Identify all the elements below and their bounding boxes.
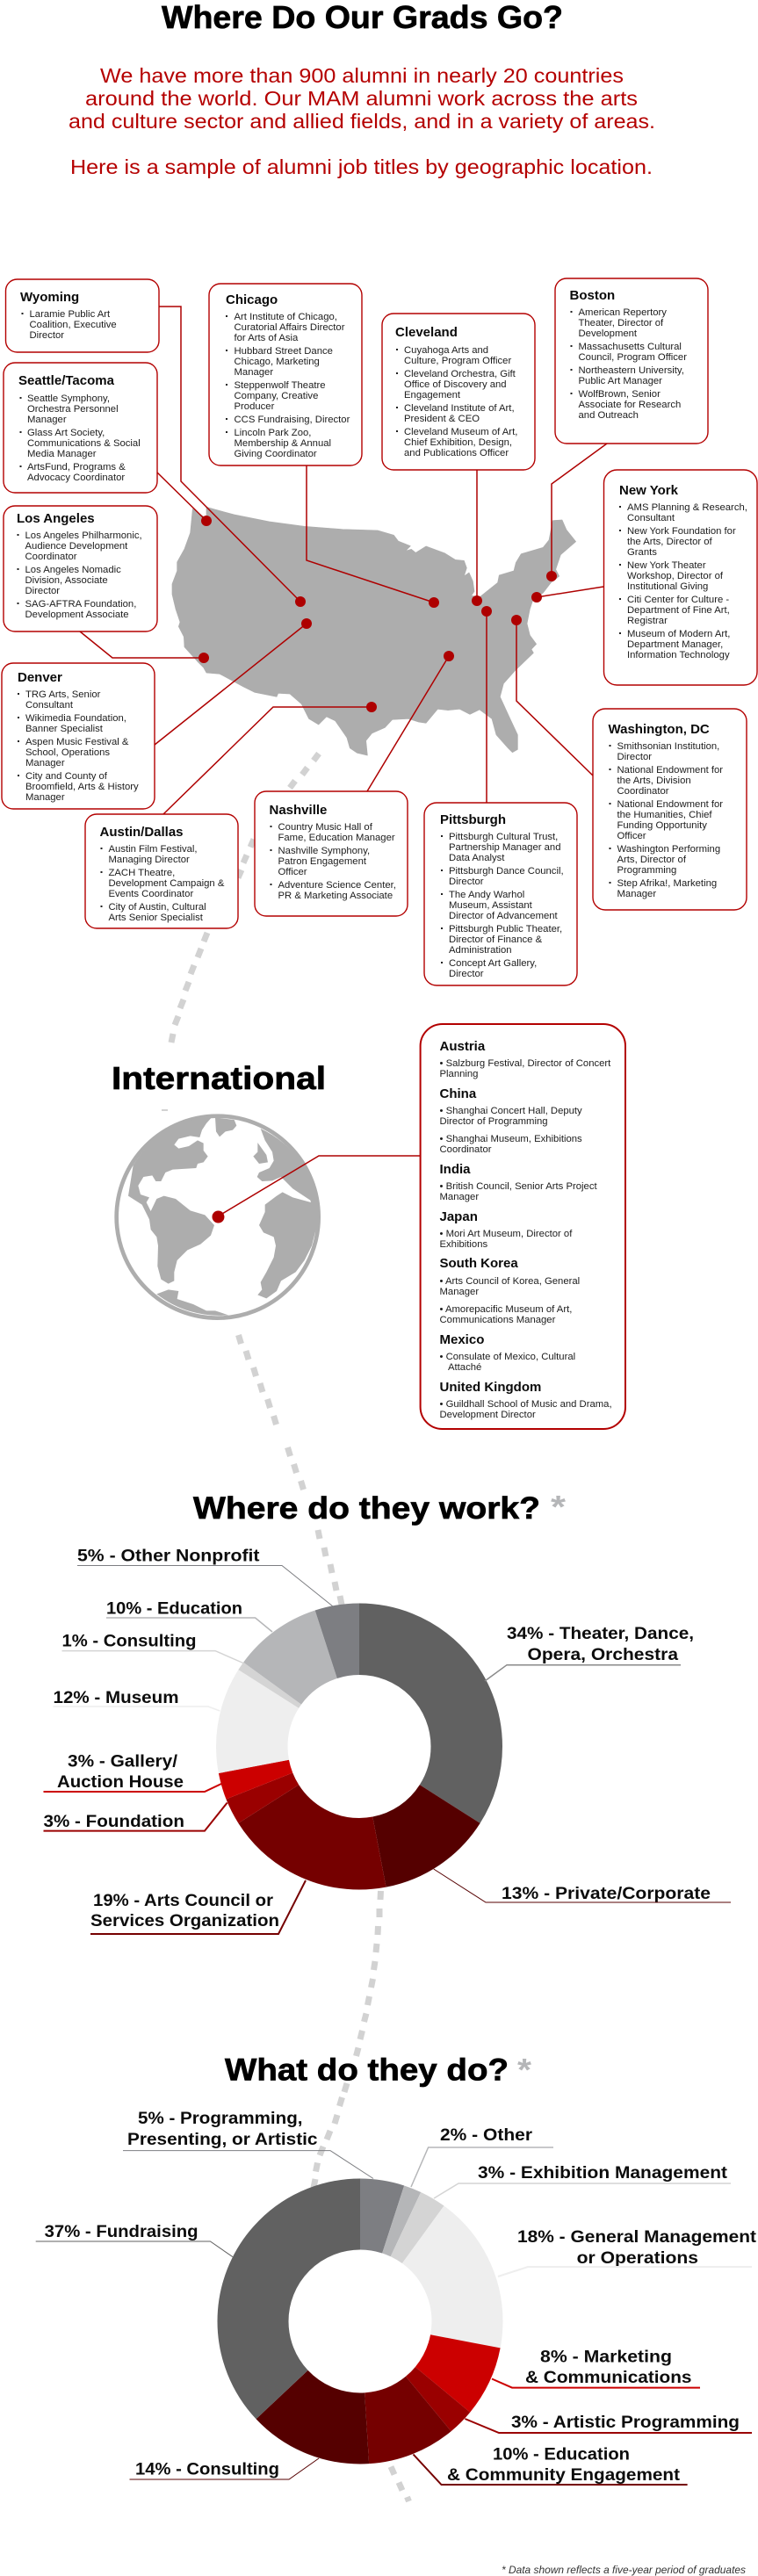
job list: Denver: TRG Arts, Senior [25,689,101,700]
international job list: Austria [439,1039,486,1054]
label: 3% Foundation: 3% - Foundation [44,1813,184,1831]
label: 5% Programming, Presenting, or Artistic [123,2110,373,2178]
globe location dot [213,1210,225,1223]
intro text: We have more than 900 alumni in nearly 20 countries [100,64,624,87]
job list: Pittsburgh: Director of Finance & [449,934,543,945]
international job list: Mexico [439,1332,484,1347]
job list: New York: Department of Fine Art, [627,605,730,616]
job list: Chicago: Curatorial Affairs Director [234,322,345,333]
job list: Los Angeles: Los Angeles Nomadic [25,565,121,575]
job list: Nashville: PR & Marketing Associate [278,891,393,901]
job list: Cleveland: Chief Exhibition, Design, [404,437,512,448]
map of the United States [172,507,576,755]
international job list: • British Council, Senior Arts Project [439,1181,597,1192]
job list: Pittsburgh: Administration [449,945,512,956]
job list: Seattle/Tacoma: Manager [27,415,67,425]
label: 37% Fundraising [36,2223,233,2257]
job list: Boston: Development [578,328,638,339]
label: 3% Exhibition Management: 3% - Exhibition Management [478,2164,728,2183]
label: 5% Other Nonprofit: 5% - Other Nonprofit [77,1548,260,1565]
label: 8% Marketing & Communications: 8% - Marketing [540,2349,672,2367]
label: 37% Fundraising: 37% - Fundraising [45,2223,199,2241]
label: 10% Education [106,1600,272,1632]
job list: Cleveland: President & CEO [404,414,480,424]
job list: Chicago: Producer [234,401,275,412]
job list: Washington, DC [610,741,723,899]
job list: Chicago: Hubbard Street Dance [234,346,333,357]
international job list: Coordinator [439,1144,492,1155]
job list: Washington, DC: Smithsonian Institution, [617,741,719,752]
job list: Boston: Massachusetts Cultural [578,342,682,352]
job list: Wyoming: Coalition, Executive [30,320,117,330]
label: 19% Arts Council or Services Organization: Services Organization [90,1912,279,1930]
label: 18% General Management or Operations: 18% - General Management [517,2228,757,2247]
heading: Boston: Boston [569,288,615,303]
job list: Boston [571,307,687,421]
panel: international alumni [421,1024,625,1429]
intro text: Here is a sample of alumni job titles by geographic location. [70,155,653,178]
job list: Washington, DC: Officer [617,831,646,841]
job list: Austin/Dallas: ZACH Theatre, [109,868,175,878]
job list: Cleveland: Cleveland Museum of Art, [404,427,517,437]
job list: Denver: Consultant [25,700,74,711]
international job list: • Shanghai Concert Hall, Deputy [439,1106,582,1116]
job list: Seattle/Tacoma: Communications & Social [27,438,141,449]
label: 8% Marketing & Communications: & Communications [525,2369,692,2387]
job list: Chicago: Giving Coordinator [234,449,317,459]
heading: What do they do?: * [517,2052,531,2088]
map location dots [199,516,557,712]
international job list: • Arts Council of Korea, General [439,1276,580,1287]
job list: Boston: Associate for Research [578,400,681,410]
international job list: United Kingdom [439,1380,541,1395]
job list: New York: the Arts, Director of [627,537,713,547]
label: 13% Private/Corporate [434,1869,731,1903]
label: 10% Education: 10% - Education [106,1600,242,1618]
job list: Chicago: Lincoln Park Zoo, [234,428,311,438]
label: 34% Theater, Dance, Opera, Orchestra: 34% - Theater, Dance, [507,1625,694,1643]
leader line: international [218,1156,421,1216]
panel: Nashville [255,791,408,916]
job list: Seattle/Tacoma: ArtsFund, Programs & [27,462,126,473]
job list: Los Angeles: Audience Development [25,541,128,552]
label: 3% Artistic Programming: 3% - Artistic Programming [511,2414,740,2432]
job list: Los Angeles: Development Associate [25,610,129,620]
job list: Seattle/Tacoma: Glass Art Society, [27,428,105,438]
job list: Chicago: Steppenwolf Theatre [234,380,326,391]
job list: Pittsburgh: Pittsburgh Public Theater, [449,924,562,934]
job list: Pittsburgh [441,832,564,979]
job list: Cleveland [396,345,517,458]
job list: Seattle/Tacoma: Seattle Symphony, [27,393,110,404]
label: 3% Gallery/Auction House [44,1752,221,1792]
label: 2% Other: 2% - Other [440,2126,533,2145]
job list: Nashville: Adventure Science Center, [278,880,396,891]
job list: New York: Institutional Giving [627,581,708,592]
panel: Pittsburgh [424,803,577,985]
job list: Denver [18,689,139,803]
label: 8% Marketing & Communications [492,2349,700,2388]
international job list: • Salzburg Festival, Director of Concert [439,1058,611,1069]
job list: New York: Consultant [627,513,675,523]
donut chart: what do they do [253,2214,467,2428]
job list: Seattle/Tacoma: Orchestra Personnel [27,404,119,415]
international job list: India [439,1162,471,1177]
heading: What do they do?: What do they do? [225,2053,509,2088]
job list: Cleveland: Office of Discovery and [404,379,507,390]
job list: Boston: and Outreach [578,410,639,421]
job list: Chicago: for Arts of Asia [234,333,299,343]
job list: Denver: Broomfield, Arts & History [25,782,139,792]
heading: Los Angeles: Los Angeles [17,511,95,526]
panel: Chicago [209,284,362,465]
label: 34% Theater, Dance, Opera, Orchestra [485,1625,694,1681]
international job list: Communications Manager [439,1315,556,1325]
job list: Seattle/Tacoma [19,393,141,483]
job list: Boston: American Repertory [578,307,667,318]
job list: Cleveland: Cleveland Orchestra, Gift [404,369,516,379]
heading: Denver: Denver [18,670,62,685]
international job list: Manager [439,1192,479,1202]
label: 18% General Management or Operations: or Operations [577,2249,698,2268]
international job list: • Shanghai Museum, Exhibitions [439,1134,582,1144]
job list: Boston: Northeastern University, [578,365,684,376]
job list: Los Angeles: Division, Associate [25,575,108,586]
job list: Cleveland: Engagement [404,390,461,400]
job list: Washington, DC: Step Afrika!, Marketing [617,878,717,889]
intro text: around the world. Our MAM alumni work across the arts [85,87,638,110]
job list: Washington, DC: the Arts, Division [617,776,691,786]
job list: Washington, DC: Director [617,752,652,762]
footnote: * Data shown reflects a five-year period of graduates [502,2564,746,2576]
job list: Wyoming: Laramie Public Art [30,309,111,320]
heading: Washington, DC: Washington, DC [608,722,710,737]
international job list: • Consulate of Mexico, Cultural [439,1352,575,1362]
leader lines from boxes to map points [80,307,607,814]
label: 13% Private/Corporate: 13% - Private/Corporate [502,1885,711,1903]
job list: Boston: Public Art Manager [578,376,662,386]
heading: International: International [112,1060,326,1096]
job list: Nashville: Fame, Education Manager [278,833,395,843]
job list: Wyoming: Director [30,330,64,341]
job list: Cleveland: Culture, Program Officer [404,356,511,366]
heading: Chicago: Chicago [226,292,278,307]
job list: Chicago: Chicago, Marketing [234,357,320,367]
job list: Denver: City and County of [25,771,108,782]
job list: Los Angeles: Coordinator [25,552,77,562]
title: Where Do Our Grads Go? [162,0,563,35]
label: 19% Arts Council or Services Organization [90,1880,306,1934]
job list: Washington, DC: National Endowment for [617,799,723,810]
job list: Denver: Manager [25,758,65,768]
international job list: Development Director [439,1410,536,1420]
job list: New York: Information Technology [627,650,730,660]
job list: New York: AMS Planning & Research, [627,502,747,513]
job list: Pittsburgh: Museum, Assistant [449,900,533,911]
job list: Austin/Dallas: Development Campaign & [109,878,225,889]
label: 3% Artistic Programming [465,2414,752,2433]
label: 5% Programming, Presenting, or Artistic: 5% - Programming, [138,2110,302,2128]
job list: Pittsburgh: The Andy Warhol [449,890,524,900]
job list: Cleveland: Cuyahoga Arts and [404,345,488,356]
heading: Where do they work?: * [551,1489,566,1525]
label: 10% Education & Community Engagement: 10% - Education [493,2446,630,2464]
international job list: Exhibitions [439,1239,487,1250]
dashed path connecting sections [162,754,409,2501]
job list: Seattle/Tacoma: Advocacy Coordinator [27,473,125,483]
label: 3% Gallery/Auction House: Auction House [57,1773,184,1792]
international job list: Manager [439,1287,479,1297]
job list: Austin/Dallas [100,844,225,923]
job list: Los Angeles: Los Angeles Philharmonic, [25,530,142,541]
label: 34% Theater, Dance, Opera, Orchestra: Opera, Orchestra [527,1646,678,1664]
label: 10% Education & Community Engagement [413,2446,688,2485]
job list: Austin/Dallas: Austin Film Festival, [109,844,198,855]
job list: Chicago: Membership & Annual [234,438,331,449]
intro text [69,64,655,178]
heading: Where do they work?: Where do they work? [193,1491,540,1526]
job list: New York: Registrar [627,616,668,626]
label: 3% Exhibition Management [434,2164,731,2198]
heading: Seattle/Tacoma: Seattle/Tacoma [18,373,115,388]
job list: Los Angeles: SAG-AFTRA Foundation, [25,599,136,610]
panel: Washington, DC [593,709,747,910]
international job list: Attaché [448,1362,481,1373]
label: 14% Consulting [130,2458,319,2479]
job list: Cleveland: Cleveland Institute of Art, [404,403,515,414]
panel: Seattle/Tacoma [4,363,157,493]
panel: Austin/Dallas [85,814,238,928]
job list: Austin/Dallas: Managing Director [109,855,190,865]
job list: Pittsburgh: Director [449,969,484,979]
job list: Pittsburgh: Director [449,877,484,887]
job list: Chicago: Art Institute of Chicago, [234,312,337,322]
job list: Pittsburgh: Director of Advancement [449,911,559,921]
job list: Los Angeles [18,530,142,620]
job list: Chicago: Company, Creative [234,391,318,401]
job list: Nashville [271,822,396,901]
job list: Nashville: Patron Engagement [278,856,367,867]
job list: Denver: School, Operations [25,747,110,758]
international job list [439,1039,612,1420]
job list: Washington, DC: National Endowment for [617,765,723,776]
job list: Chicago: Manager [234,367,273,378]
job list: Seattle/Tacoma: Media Manager [27,449,97,459]
job list: Washington, DC: Arts, Director of [617,855,687,865]
international job list: Japan [439,1209,478,1224]
label: 1% Consulting [61,1633,244,1663]
job list: New York: Museum of Modern Art, [627,629,730,639]
job list: New York: Citi Center for Culture - [627,595,729,605]
panel: Wyoming [5,279,159,352]
job list: New York: Department Manager, [627,639,723,650]
international job list: South Korea [439,1256,518,1271]
label: 12% Museum [53,1689,220,1711]
panel: Boston [555,278,708,444]
job list: Pittsburgh: Pittsburgh Dance Council, [449,866,564,877]
intro text: and culture sector and allied fields, and in a variety of areas. [69,110,655,133]
international job list: Planning [439,1069,478,1079]
international job list: China [439,1086,477,1101]
job list: Nashville: Nashville Symphony, [278,846,370,856]
job list: Austin/Dallas: Arts Senior Specialist [109,913,204,923]
job list: Denver: Banner Specialist [25,724,104,734]
label: 3% Gallery/Auction House: 3% - Gallery/ [68,1752,178,1771]
international job list: • Mori Art Museum, Director of [439,1229,573,1239]
panel: Denver [2,663,155,809]
job list: Nashville: Officer [278,867,307,877]
label: 18% General Management or Operations [498,2228,757,2277]
international job list: • Guildhall School of Music and Drama, [439,1399,612,1410]
label: 10% Education & Community Engagement: & Community Engagement [447,2466,681,2485]
job list: Washington, DC: Programming [617,865,676,876]
international job list: Director of Programming [439,1116,548,1127]
job list: Nashville: Country Music Hall of [278,822,373,833]
job list: New York: Grants [627,547,657,558]
heading: Nashville: Nashville [269,803,327,818]
job list: Chicago [226,312,350,459]
job list: New York: New York Theater [627,560,706,571]
job list: Pittsburgh: Partnership Manager and [449,842,560,853]
job list: Denver: Wikimedia Foundation, [25,713,126,724]
job list: Boston: WolfBrown, Senior [578,389,661,400]
label: 3% Foundation [44,1802,227,1831]
job list: Washington, DC: Coordinator [617,786,669,797]
panel: Los Angeles [4,506,157,631]
panel: New York [604,470,757,685]
job list: New York [619,502,747,660]
label: 19% Arts Council or Services Organization: 19% - Arts Council or [93,1892,274,1910]
job list: Denver: Manager [25,792,65,803]
heading: Pittsburgh: Pittsburgh [440,812,506,827]
job list: Washington, DC: Manager [617,889,656,899]
label: 2% Other [411,2126,553,2187]
label: 5% Programming, Presenting, or Artistic: Presenting, or Artistic [127,2131,318,2149]
job list: New York: Workshop, Director of [627,571,724,581]
job list: Pittsburgh: Pittsburgh Cultural Trust, [449,832,558,842]
job list: Austin/Dallas: Events Coordinator [109,889,193,899]
job list: Washington, DC: the Humanities, Chief [617,810,712,820]
job list: Washington, DC: Funding Opportunity [617,820,707,831]
job list: Pittsburgh: Concept Art Gallery, [449,958,537,969]
job list: Washington, DC: Washington Performing [617,844,720,855]
job list: New York: New York Foundation for [627,526,736,537]
donut chart: where do they work [252,1639,466,1854]
job list: Boston: Council, Program Officer [578,352,687,363]
international job list: • Amorepacific Museum of Art, [439,1304,572,1315]
heading: Cleveland: Cleveland [395,325,458,340]
job list: Boston: Theater, Director of [578,318,664,328]
job list: Cleveland: and Publications Officer [404,448,509,458]
icon: globe [117,1116,319,1318]
job list: Denver: Aspen Music Festival & [25,737,129,747]
heading: Austin/Dallas: Austin/Dallas [100,825,184,840]
heading: New York: New York [619,483,679,498]
heading: Wyoming: Wyoming [20,290,79,305]
job list: Pittsburgh: Data Analyst [449,853,505,863]
job list: Los Angeles: Director [25,586,60,596]
label: 12% Museum: 12% - Museum [53,1689,179,1707]
job list: Austin/Dallas: City of Austin, Cultural [109,902,206,913]
panel: Cleveland [382,314,535,470]
job list: Wyoming [21,309,117,341]
label: 14% Consulting: 14% - Consulting [135,2461,279,2479]
job list: Chicago: CCS Fundraising, Director [234,415,350,425]
label: 1% Consulting: 1% - Consulting [61,1633,197,1651]
label: 5% Other Nonprofit [77,1548,333,1606]
